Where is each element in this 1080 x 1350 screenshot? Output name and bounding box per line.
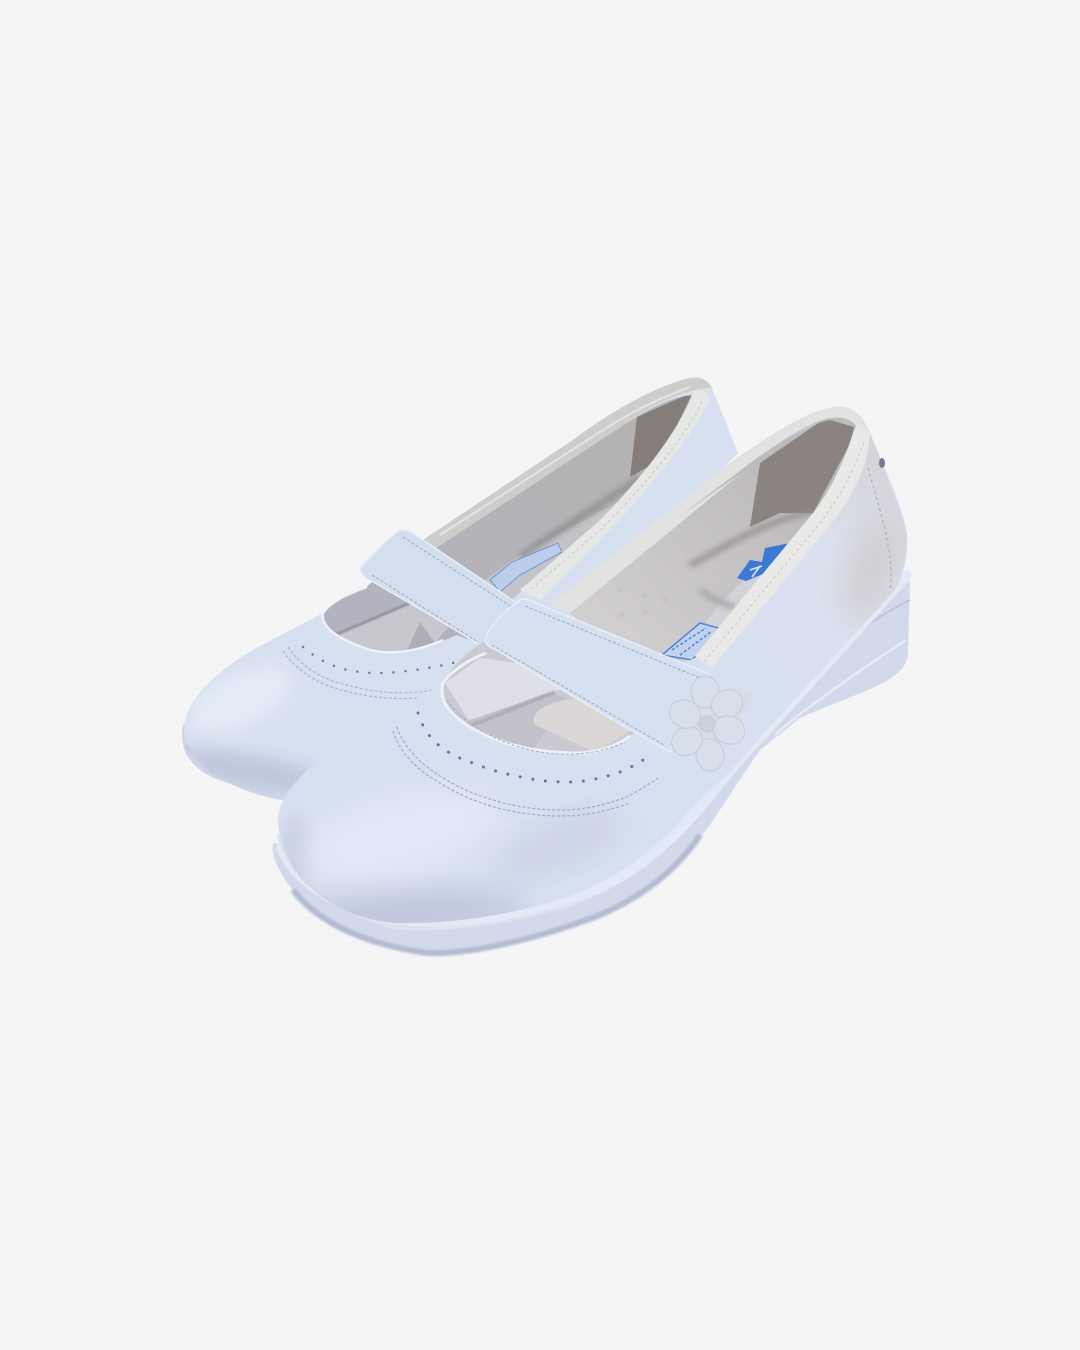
toe cap shading	[319, 884, 523, 923]
front shoe stitching and perforations	[418, 713, 648, 782]
back shoe strap	[360, 530, 517, 647]
front shoe heel seam and rivet	[868, 468, 891, 590]
back shoe sole	[182, 720, 330, 795]
flower ornament	[665, 676, 749, 773]
front shoe opening under strap	[441, 640, 640, 753]
front shoe upper	[278, 407, 907, 923]
front shoe sole and wedge	[273, 573, 910, 953]
heel lining dark panel	[750, 415, 860, 527]
product photo: pair of white Mary Jane wedge shoes	[182, 378, 912, 958]
insole blue logo	[737, 543, 790, 581]
back shoe upper	[184, 377, 738, 800]
back shoe stitching and perforations	[303, 647, 473, 673]
front shoe collar rim	[550, 407, 870, 613]
back shoe insole markings	[490, 543, 562, 592]
front shoe interior lining	[570, 420, 855, 680]
back shoe opening	[323, 560, 480, 652]
back shoe collar rim	[423, 377, 712, 552]
front shoe strap	[485, 599, 710, 752]
back shoe interior lining	[360, 395, 693, 640]
insole fold shadow	[690, 510, 815, 565]
back shoe (left)	[163, 377, 738, 804]
front shoe (right)	[269, 407, 913, 953]
insole blue label	[662, 623, 722, 660]
elastic strip under flower	[700, 690, 752, 768]
